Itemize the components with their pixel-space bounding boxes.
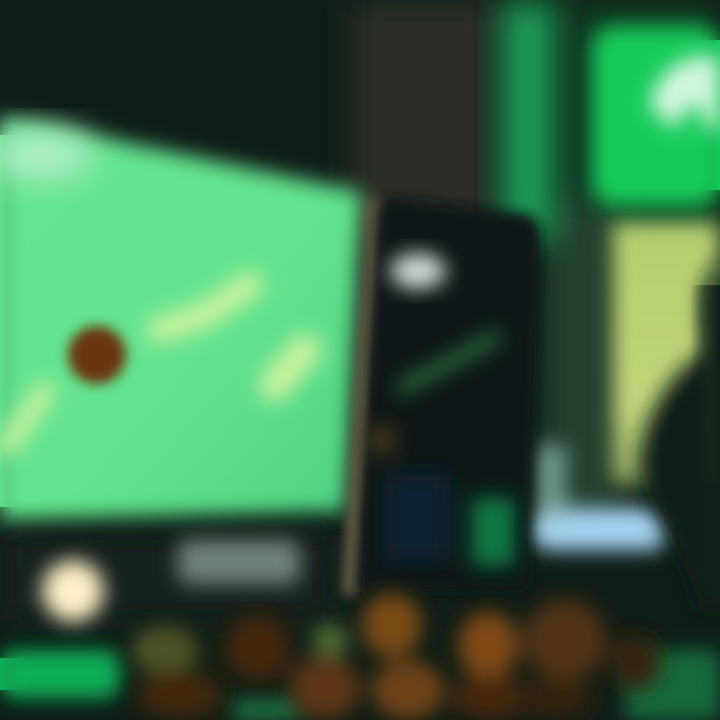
phone lower detail — [367, 425, 514, 566]
icon: white swoosh on sign — [650, 56, 720, 134]
sign right edge — [690, 40, 720, 190]
phone edge — [342, 200, 384, 595]
chart line — [8, 285, 305, 445]
pale yellow panel — [612, 222, 720, 484]
light blue glow — [530, 445, 670, 550]
phone chart line — [398, 335, 500, 390]
vertical green band — [500, 0, 556, 240]
phone white spot — [390, 253, 446, 289]
monitor screen — [0, 118, 362, 522]
silhouette right edge — [690, 285, 720, 595]
cream light — [42, 560, 104, 622]
phone body — [358, 198, 540, 592]
chart marker: brown dot — [68, 326, 126, 384]
screen left edge — [0, 135, 30, 507]
green desk strip — [0, 650, 720, 720]
grey label blob — [178, 540, 300, 584]
bright green sign — [592, 26, 720, 206]
monitor base — [0, 535, 330, 620]
screen highlight — [0, 129, 94, 181]
person silhouette — [640, 262, 720, 610]
desk strip left edge — [0, 658, 30, 690]
brown pile — [131, 593, 661, 720]
